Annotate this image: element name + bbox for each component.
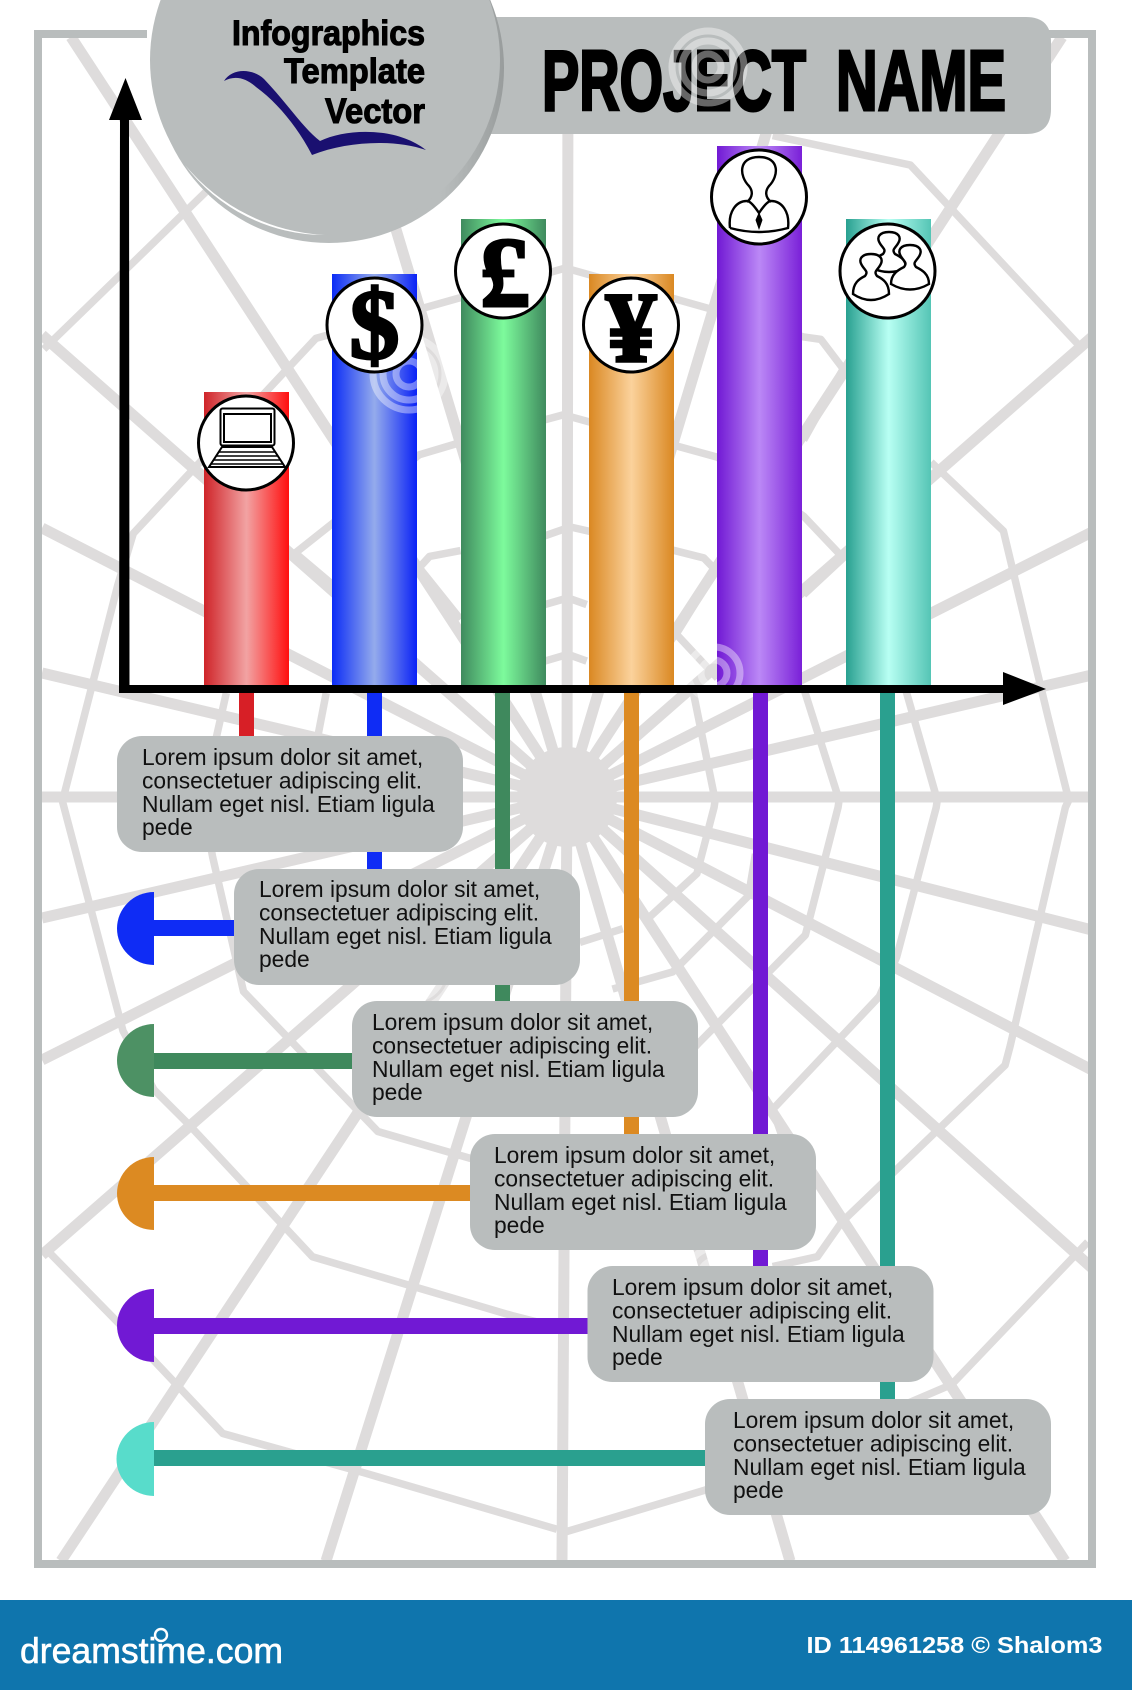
bar: green	[461, 219, 546, 685]
watermark spirals	[373, 31, 744, 1300]
logo text: Infographics	[232, 14, 425, 53]
bar: blue	[332, 274, 417, 685]
icon: businessman	[712, 150, 806, 244]
callout 6: pede	[733, 1477, 784, 1503]
callout 6: Lorem ipsum dolor sit amet,	[733, 1407, 1014, 1433]
callout 5: pede	[612, 1344, 663, 1370]
callout 4	[470, 1134, 816, 1250]
callout 4: consectetuer adipiscing elit.	[494, 1165, 774, 1191]
icon: laptop	[198, 396, 294, 490]
title text: PROJECT	[542, 34, 806, 129]
icon: team	[840, 224, 935, 318]
callout 2	[234, 869, 580, 985]
logo swoosh	[224, 71, 426, 155]
callout 3: pede	[372, 1079, 423, 1105]
marker: green half circle	[117, 1024, 154, 1097]
title text: NAME	[836, 34, 1006, 129]
bar chart	[204, 146, 931, 685]
connector: orange	[154, 693, 639, 1201]
title banner	[484, 17, 1051, 134]
icon: yen: ¥	[606, 272, 656, 383]
callout 5: Nullam eget nisl. Etiam ligula	[612, 1321, 905, 1347]
y-axis arrow	[109, 78, 142, 693]
marker: blue half circle	[117, 892, 154, 965]
callout 2: Nullam eget nisl. Etiam ligula	[259, 923, 552, 949]
callout 6: Nullam eget nisl. Etiam ligula	[733, 1454, 1026, 1480]
footer logo text: dreamstime.com	[20, 1630, 283, 1671]
connector: blue	[154, 693, 382, 936]
callout 2: consectetuer adipiscing elit.	[259, 899, 539, 925]
bar: purple	[717, 146, 802, 685]
logo highlight arc	[185, 165, 325, 235]
connector: teal	[154, 693, 895, 1466]
callout 5: Lorem ipsum dolor sit amet,	[612, 1274, 893, 1300]
callout 1: consectetuer adipiscing elit.	[142, 767, 422, 793]
bar: teal	[846, 219, 931, 685]
connector: purple	[154, 693, 768, 1334]
footer logo spiral	[155, 1629, 167, 1641]
icon: pound: £	[480, 217, 530, 328]
icon: pound	[456, 217, 550, 328]
footer image id: ID 114961258 © Shalom3	[806, 1632, 1102, 1658]
callout 1: pede	[142, 814, 193, 840]
callout 5	[588, 1266, 934, 1382]
callout 6	[705, 1399, 1051, 1515]
callout 2: Lorem ipsum dolor sit amet,	[259, 876, 540, 902]
marker: teal half circle	[116, 1422, 154, 1496]
bar: orange	[589, 274, 674, 685]
x-axis arrow	[120, 672, 1046, 705]
marker: orange half circle	[117, 1157, 154, 1230]
callout 1	[117, 736, 463, 852]
connector: green	[154, 693, 510, 1069]
callout 3: Lorem ipsum dolor sit amet,	[372, 1009, 653, 1035]
callout 3	[352, 1001, 698, 1117]
bar: red	[204, 392, 289, 685]
footer bar	[0, 1600, 1132, 1690]
callout 3: Nullam eget nisl. Etiam ligula	[372, 1056, 665, 1082]
callout 4: Nullam eget nisl. Etiam ligula	[494, 1189, 787, 1215]
marker: purple half circle	[117, 1289, 154, 1362]
callout 5: consectetuer adipiscing elit.	[612, 1297, 892, 1323]
callout 4: Lorem ipsum dolor sit amet,	[494, 1142, 775, 1168]
logo text: Template	[284, 52, 425, 91]
callout 3: consectetuer adipiscing elit.	[372, 1032, 652, 1058]
callout 2: pede	[259, 946, 310, 972]
callout 1: Lorem ipsum dolor sit amet,	[142, 744, 423, 770]
icon: dollar	[327, 269, 422, 380]
connector: red	[239, 693, 254, 743]
callout 4: pede	[494, 1212, 545, 1238]
chart axes	[109, 78, 1046, 705]
logo circle	[150, 0, 504, 243]
icon: dollar: $	[350, 269, 400, 380]
callout 1: Nullam eget nisl. Etiam ligula	[142, 791, 435, 817]
logo text: Vector	[325, 92, 425, 131]
logo text	[232, 14, 425, 131]
callout 6: consectetuer adipiscing elit.	[733, 1430, 1013, 1456]
icon: yen	[584, 272, 678, 383]
